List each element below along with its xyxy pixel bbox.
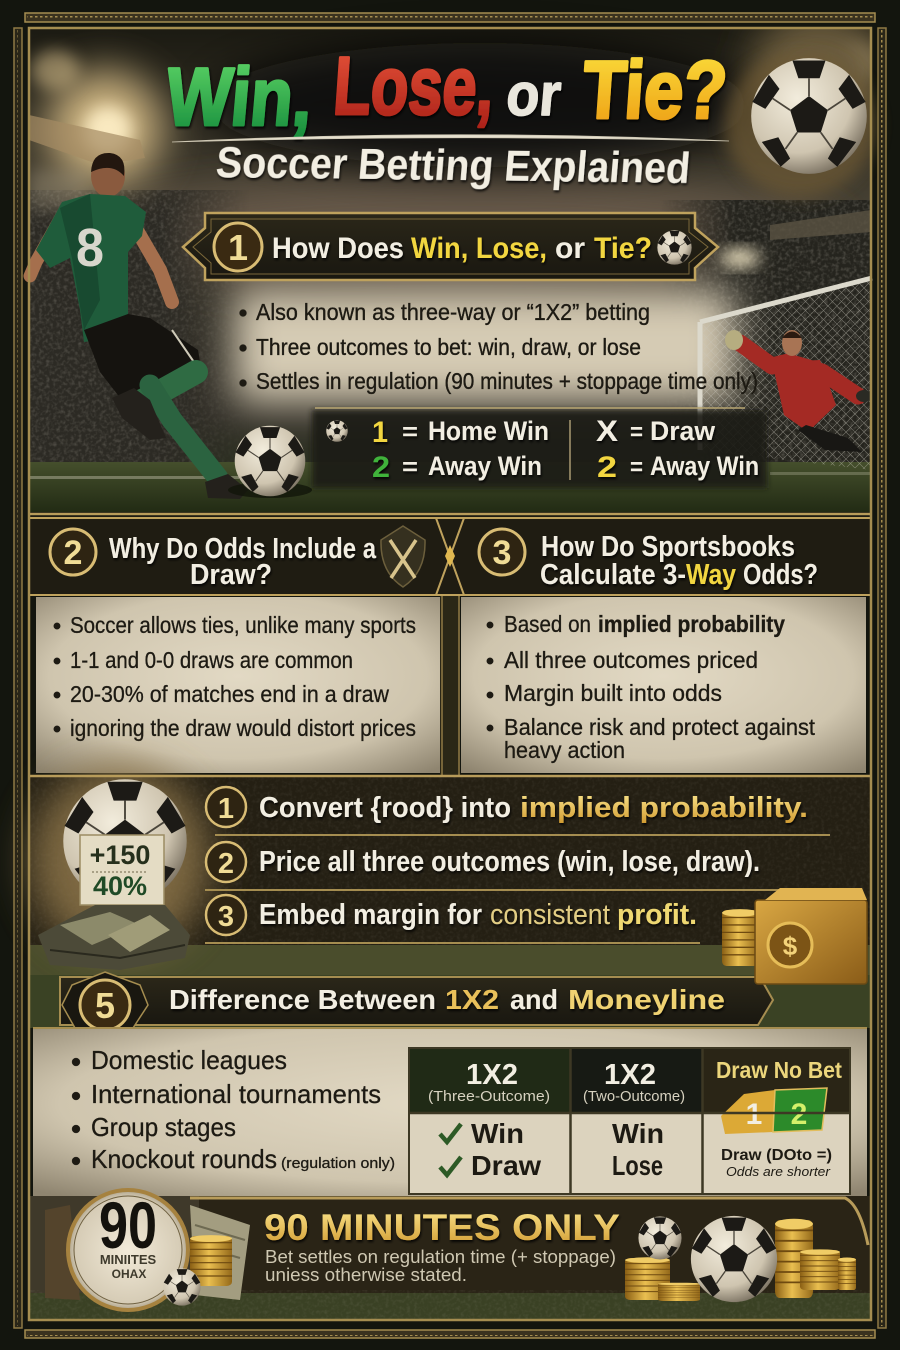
column: 1X2 three-outcome: (Three-Outcome): [428, 1088, 550, 1105]
number badge 5: [62, 972, 148, 1036]
step 3: consistent: [490, 899, 610, 931]
1X2 legend panel: Away Win: [650, 451, 759, 481]
subtitle: Soccer Betting Explained: [214, 139, 692, 193]
section 3 heading: [479, 529, 818, 591]
step 3: Embed margin for: [259, 899, 482, 931]
section 2 heading: Draw?: [190, 559, 272, 591]
title: Tie?: [580, 45, 730, 136]
title: Win,: [162, 52, 316, 143]
icon: goal net and goalkeeper: [700, 278, 872, 470]
1X2 legend panel: Draw: [650, 416, 716, 446]
step 1: 1: [218, 793, 234, 825]
icon: crossed swords shield: [381, 526, 425, 587]
step 1: Convert {rood} into: [259, 792, 511, 824]
column: 1X2 three-outcome: Draw: [471, 1150, 541, 1181]
icon: 90 minutes clock: 90: [99, 1188, 157, 1262]
panel: section 2 bullets: 20-30% of matches end in a draw: [70, 681, 389, 707]
title: [162, 41, 730, 143]
icon: player kicking, number 8: [30, 153, 248, 499]
center ornament between sections 2 and 3: [436, 518, 464, 776]
panel: section 2 bullets: ignoring the draw would distort prices: [70, 715, 416, 741]
1X2 legend panel: =: [402, 419, 418, 446]
number badge 1: [214, 223, 262, 271]
panel: section 2 bullets: [36, 597, 440, 773]
section 1 bullet list: [240, 299, 758, 394]
section 2 heading: [29, 516, 871, 596]
panel: section 5 bullets: International tournaments: [91, 1079, 381, 1109]
icon: 1 and 2 tag: 1: [746, 1098, 762, 1131]
section 1 heading banner: [183, 213, 718, 280]
footer heading and note: [264, 1207, 620, 1285]
icon: 1 and 2 tag: 2: [791, 1098, 807, 1131]
column: 1X2 two-outcome: 1X2: [604, 1059, 656, 1091]
panel: section 3 bullets: Based on: [504, 611, 591, 637]
column: draw no bet: Odds are shorter: [726, 1164, 831, 1179]
column: draw no bet: Draw (DOto =): [721, 1147, 832, 1164]
step 1: implied probability.: [520, 792, 808, 824]
section 1 bullet list: Three outcomes to bet: win, draw, or lose: [256, 334, 641, 360]
odds card: [80, 835, 164, 905]
section 5 heading banner: 1X2: [445, 984, 499, 1015]
hero panel: stadium scene: [29, 10, 890, 512]
column: draw no bet: [703, 1049, 849, 1179]
number badge 2: [50, 529, 96, 575]
panel: section 5 bullets: Group stages: [91, 1112, 236, 1142]
section 2 heading: Why Do Odds Include a: [109, 533, 377, 565]
heading text: Tie?: [594, 232, 652, 265]
column: 1X2 two-outcome: (Two-Outcome): [583, 1088, 685, 1105]
panel: 90 minutes footer: [29, 1196, 871, 1320]
1X2 legend panel: =: [402, 454, 418, 481]
column: 1X2 three-outcome: [410, 1049, 570, 1181]
section 5 heading banner: and: [510, 984, 558, 1015]
section 5 heading banner: Moneyline: [568, 984, 725, 1015]
panel: section 2 bullets: Soccer allows ties, unlike many sports: [70, 612, 416, 638]
panel: section 3 bullets: implied probability: [598, 611, 785, 637]
1X2 legend panel: [312, 408, 767, 488]
1X2 legend panel: 2: [597, 451, 617, 484]
section 1 bullet list: Also known as three-way or “1X2” betting: [256, 299, 650, 325]
panel: section 5 bullets: [33, 1028, 867, 1196]
heading text: or: [555, 232, 585, 265]
odds card: 40%: [93, 871, 147, 901]
footer heading and note: uniess otherwise stated.: [265, 1264, 467, 1285]
number badge 5: 5: [95, 985, 115, 1026]
heading text: Win, Lose,: [411, 232, 547, 265]
1X2 legend panel: Home Win: [428, 416, 549, 446]
icon: cash behind clock: [45, 1205, 250, 1300]
section 5 heading banner: Difference Between: [169, 984, 436, 1015]
step 2: 2: [218, 848, 234, 880]
1X2 legend panel: 2: [372, 451, 390, 484]
panel: section 3 bullets: heavy action: [504, 737, 625, 763]
odds card: +150: [90, 840, 150, 870]
heading text: How Does: [272, 232, 404, 265]
icon: 90 minutes clock: OHAX: [112, 1267, 146, 1281]
panel: section 5 bullets: Knockout rounds: [91, 1144, 277, 1174]
title divider: [172, 135, 729, 142]
icon: balls and coins right: [625, 1216, 856, 1302]
icon: soccer ball at player's foot: [228, 426, 312, 498]
icon: 1 and 2 tag: [721, 1088, 827, 1134]
icon: 90 minutes clock: [68, 1188, 188, 1310]
icon: coins and small ball left: [163, 1235, 232, 1306]
section 3 heading: How Do Sportsbooks: [541, 531, 795, 563]
column: draw no bet: Draw No Bet: [716, 1057, 842, 1083]
column: 1X2 two-outcome: Win: [612, 1118, 664, 1149]
section 3 heading: Odds?: [743, 559, 818, 591]
column: 1X2 three-outcome: Win: [471, 1118, 524, 1149]
panel: conversion steps: [29, 765, 871, 977]
panel: section 3 bullets: All three outcomes priced: [504, 647, 758, 673]
icon: stacks of cash: [38, 905, 190, 970]
step 3: profit.: [617, 899, 697, 931]
1X2 legend panel: 1: [372, 416, 388, 449]
step 3: [206, 895, 697, 935]
1X2 legend panel: Away Win: [428, 451, 542, 481]
comparison table: [409, 1048, 850, 1194]
icon: gold coins and safe: $: [783, 931, 798, 961]
number badge 2: 2: [64, 534, 82, 572]
number badge 3: [479, 529, 525, 575]
title: Lose,: [331, 41, 497, 132]
icon: gold coins and safe: [722, 888, 867, 984]
1X2 legend panel: X: [596, 415, 618, 448]
title: or: [504, 61, 564, 128]
icon: player kicking, number 8: 8: [76, 218, 104, 278]
section 1 bullet list: Settles in regulation (90 minutes + stoppage time only): [256, 368, 758, 394]
footer heading and note: Bet settles on regulation time (+ stoppage): [265, 1246, 616, 1267]
icon: small ball: [657, 230, 692, 265]
panel: section 2 bullets: 1-1 and 0-0 draws are common: [70, 647, 353, 673]
icon: ball with odds card: [63, 779, 187, 905]
panel: section 3 bullets: Balance risk and protect against: [504, 714, 816, 740]
number badge 3: 3: [493, 534, 511, 572]
panel: section 3 bullets: Margin built into odds: [504, 680, 722, 706]
title backdrop: [210, 43, 750, 167]
panel: section 5 bullets: Domestic leagues: [91, 1045, 287, 1075]
column: 1X2 three-outcome: 1X2: [466, 1059, 518, 1091]
step 1: [206, 787, 808, 827]
icon: flying soccer ball: [724, 53, 876, 197]
number badge 1: 1: [228, 227, 248, 268]
step 2: [206, 842, 760, 882]
icon: legend ball: [326, 420, 348, 442]
section 3 heading: Way: [686, 559, 736, 591]
panel: section 5 bullets: (regulation only): [281, 1155, 395, 1172]
column: 1X2 two-outcome: Lose: [612, 1150, 663, 1181]
heading text: [272, 232, 652, 265]
footer heading and note: 90 MINUTES ONLY: [264, 1207, 620, 1248]
section 3 heading: Calculate 3-: [540, 559, 686, 591]
icon: 90 minutes clock: MINIITES: [100, 1252, 156, 1267]
1X2 legend panel: =: [630, 419, 643, 446]
column: 1X2 two-outcome: [571, 1049, 702, 1181]
step 3: 3: [218, 901, 234, 933]
step 2: Price all three outcomes (win, lose, draw).: [259, 846, 760, 878]
section 5 heading banner: [29, 972, 871, 1036]
panel: section 3 bullets: [461, 597, 866, 773]
1X2 legend panel: =: [630, 454, 643, 481]
